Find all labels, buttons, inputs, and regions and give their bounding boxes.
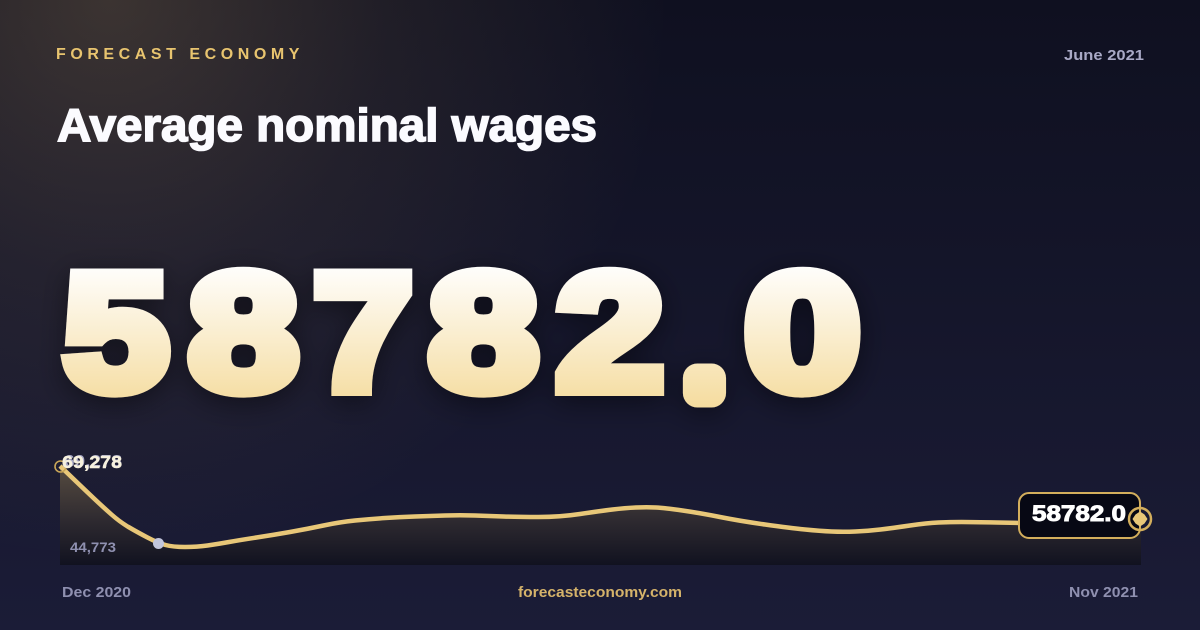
title: Average nominal wages (57, 99, 597, 151)
end date: Nov 2021 (1069, 584, 1138, 601)
brand label: FORECAST ECONOMY (56, 46, 304, 63)
main value: 8 (189, 241, 298, 424)
main value: 8 (429, 241, 538, 424)
main value: 5 (64, 241, 168, 424)
current marker (1129, 508, 1151, 530)
min label: 44,773 (70, 539, 116, 555)
current value callout (1019, 493, 1140, 538)
main value: 7 (313, 241, 413, 425)
sparkline chart (55, 451, 1151, 565)
start date: Dec 2020 (62, 584, 131, 601)
date: June 2021 (1064, 47, 1144, 64)
main value: 2 (556, 240, 664, 425)
max label: 69,278 (62, 452, 122, 472)
main value: 0 (745, 240, 860, 424)
website: forecasteconomy.com (518, 584, 682, 601)
chart line (60, 466, 1020, 547)
main value (64, 240, 860, 425)
main value: . (691, 303, 718, 415)
max marker (55, 461, 66, 472)
current value callout: 58782.0 (1032, 501, 1126, 526)
min marker (153, 538, 164, 549)
chart area fill (60, 466, 1141, 565)
max label: 69,278 (64, 451, 122, 471)
